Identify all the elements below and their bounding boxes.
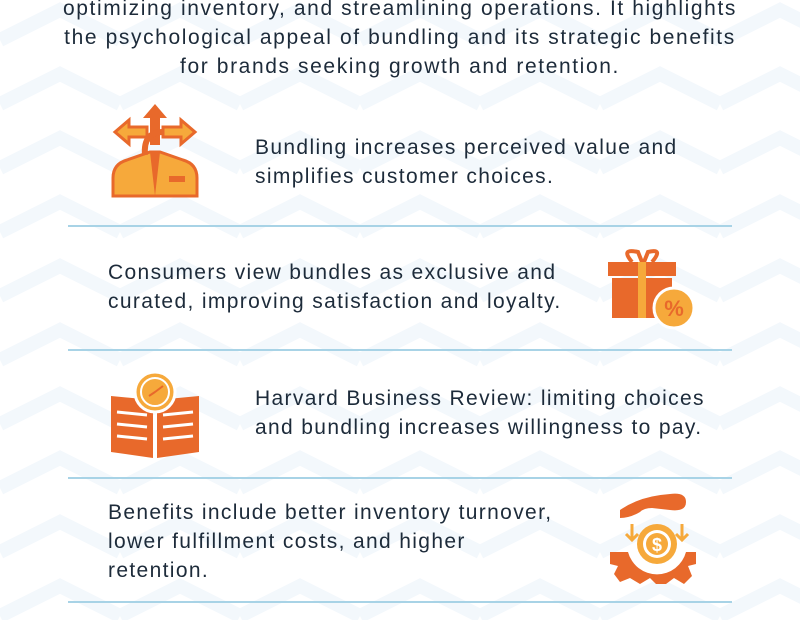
icon: gift with percent: % (664, 296, 684, 321)
intro text (63, 0, 737, 78)
item 4 text: Benefits include better inventory turnover, (108, 501, 552, 524)
icon: crossroads person (112, 104, 198, 198)
intro text: for brands seeking growth and retention. (180, 55, 620, 78)
item 2 text (108, 261, 562, 313)
item 4 text: retention. (108, 559, 209, 582)
item 3 text (255, 387, 705, 439)
item 3 text: Harvard Business Review: limiting choices (255, 387, 705, 410)
item 4 text: lower fulfillment costs, and higher (108, 530, 466, 553)
icon: gift with percent (608, 249, 692, 330)
item 1 text: simplifies customer choices. (255, 165, 554, 188)
intro text: the psychological appeal of bundling and its strategic benefits (64, 26, 736, 49)
icon: hand coin gear (610, 494, 696, 584)
icon: book with clock (111, 374, 199, 458)
item 2 text: curated, improving satisfaction and loyalty. (108, 290, 562, 313)
item 3 text: and bundling increases willingness to pay. (255, 416, 702, 439)
item 2 text: Consumers view bundles as exclusive and (108, 261, 556, 284)
item 1 text: Bundling increases perceived value and (255, 136, 678, 159)
icon: hand coin gear: $ (652, 535, 662, 555)
item 4 text (108, 501, 552, 582)
item 1 text (255, 136, 678, 188)
